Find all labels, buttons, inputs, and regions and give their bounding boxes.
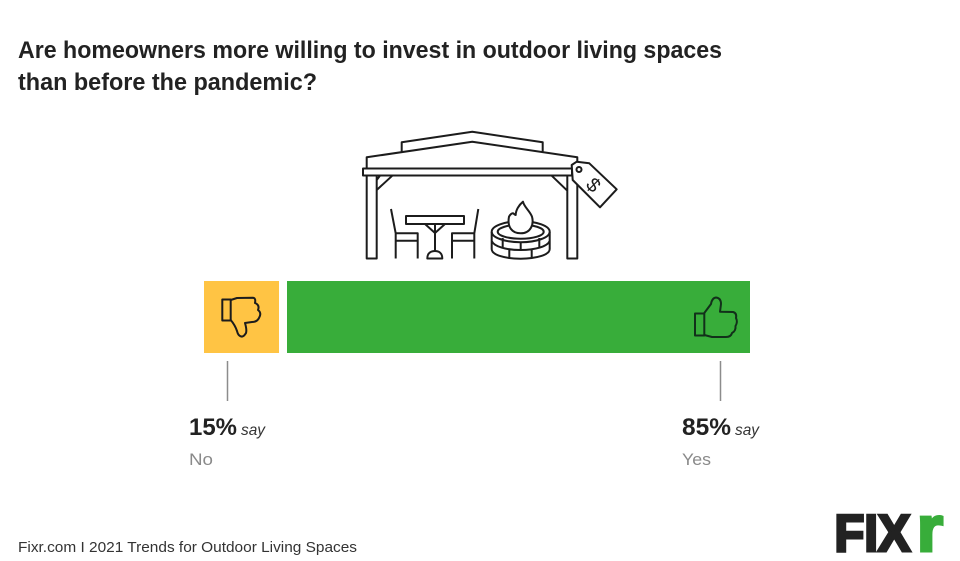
icon: thumbs down	[222, 298, 260, 337]
callout: no: say	[241, 422, 266, 439]
callout: no: No	[189, 450, 213, 469]
source footer: Fixr.com I 2021 Trends for Outdoor Living Spaces	[18, 539, 357, 556]
bar segment: no 15%	[204, 281, 279, 353]
callout: no: 15%	[189, 414, 237, 441]
callout: yes	[682, 361, 760, 469]
logo: Fixr	[834, 493, 943, 561]
table	[406, 216, 464, 258]
gazebo posts and braces	[367, 176, 577, 258]
title	[18, 37, 722, 96]
callout: yes: Yes	[682, 450, 711, 469]
title: Are homeowners more willing to invest in outdoor living spaces	[18, 37, 722, 64]
gazebo roof	[367, 132, 577, 168]
callout: yes: 85%	[682, 414, 731, 441]
price tag	[572, 162, 617, 207]
icon: gazebo with table, fire pit and price tag	[363, 132, 617, 259]
fire pit	[492, 221, 550, 259]
chairs	[391, 209, 478, 258]
callout: yes: say	[735, 422, 760, 439]
price tag: $	[581, 174, 605, 197]
gazebo beam	[363, 168, 572, 176]
title: than before the pandemic?	[18, 69, 317, 96]
callout: no	[189, 361, 266, 469]
flame	[509, 202, 533, 233]
icon: thumbs up	[695, 298, 737, 337]
bar segment: yes 85%	[287, 281, 750, 353]
